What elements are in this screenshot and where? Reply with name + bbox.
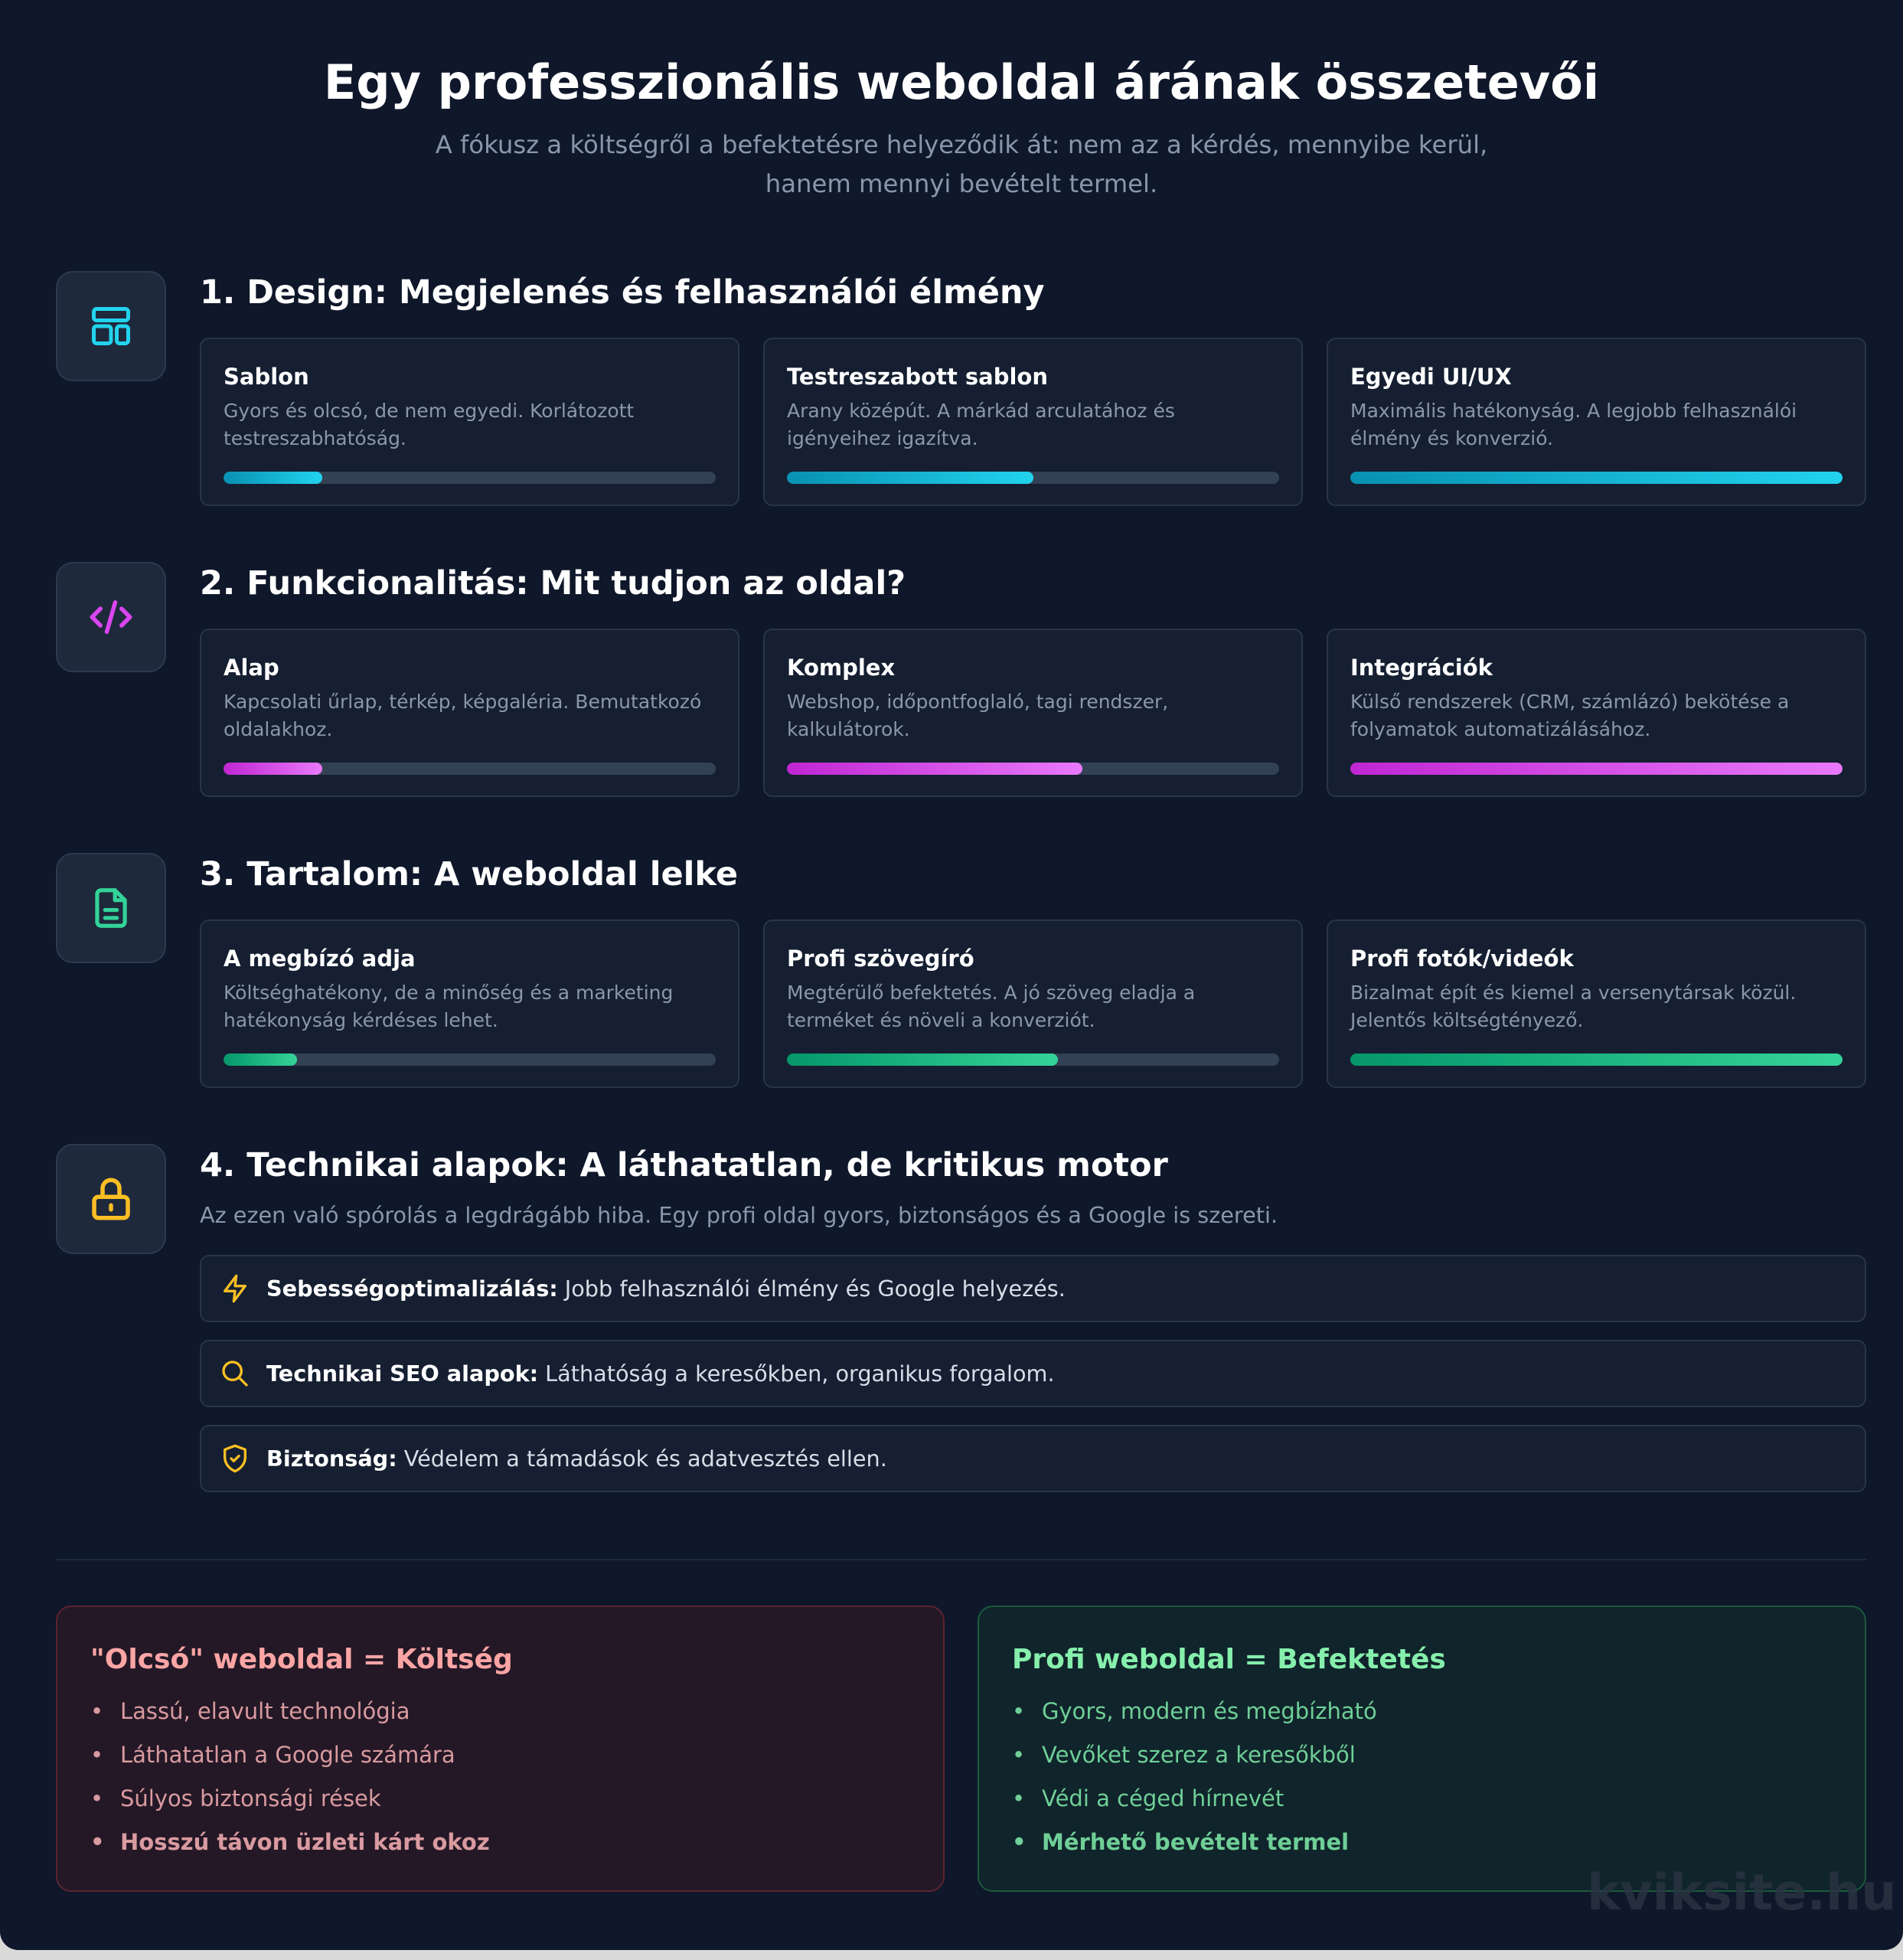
heading: technikai alapok: 4. Technikai alapok: A láthatatlan, de kritikus motor — [200, 1146, 1168, 1184]
list: profi: Gyors, modern és megbízható — [1042, 1698, 1377, 1724]
list: profi — [1015, 1698, 1377, 1855]
card: integrációk: Külső rendszerek (CRM, számlázó) bekötése a folyamatok automatizálásához. — [1350, 691, 1789, 740]
list: olcsó: Súlyos biztonsági rések — [120, 1785, 381, 1811]
item: seo: Technikai SEO alapok: — [266, 1361, 538, 1387]
card: alap: Kapcsolati űrlap, térkép, képgaléria. Bemutatkozó oldalakhoz. — [224, 691, 701, 740]
watermark: kviksite.hu — [1587, 1864, 1896, 1922]
subtitle — [436, 130, 1487, 198]
card: profi fotók/videók: Bizalmat épít és kiemel a versenytársak közül. Jelentős költségtényező. — [1350, 982, 1796, 1031]
card: testreszabott sablon: Arany középút. A márkád arculatához és igényeihez igazítva. — [787, 400, 1175, 449]
card: testreszabott sablon: Testreszabott sablon — [787, 364, 1048, 390]
icon: document — [56, 853, 166, 963]
list: profi: Mérhető bevételt termel — [1042, 1829, 1349, 1855]
card: a megbízó adja — [200, 920, 739, 1088]
heading: olcsó: "Olcsó" weboldal = Költség — [90, 1644, 513, 1675]
card: profi szövegíró — [763, 920, 1303, 1088]
card: sablon: Sablon — [224, 364, 309, 390]
card: profi fotók/videók — [1327, 920, 1866, 1088]
item: sebesség: Jobb felhasználói élmény és Google helyezés. — [565, 1276, 1066, 1302]
heading: profi: Profi weboldal = Befektetés — [1012, 1644, 1446, 1675]
card: a megbízó adja: A megbízó adja — [224, 946, 416, 972]
heading: design: 1. Design: Megjelenés és felhasználói élmény — [200, 273, 1045, 312]
subtitle: hanem mennyi bevételt termel. — [765, 169, 1157, 198]
panel: olcsó weboldal — [56, 1606, 945, 1892]
card: egyedi ui/ux: Egyedi UI/UX — [1350, 364, 1512, 390]
card: a megbízó adja: Költséghatékony, de a minőség és a marketing hatékonyság kérdéses lehet. — [224, 982, 673, 1031]
item: sebesség: Sebességoptimalizálás: — [266, 1276, 558, 1302]
list: olcsó: Hosszú távon üzleti kárt okoz — [120, 1829, 490, 1855]
item: seo: Láthatóság a keresőkben, organikus forgalom. — [545, 1361, 1055, 1387]
card: sablon — [200, 338, 739, 506]
card: komplex: Webshop, időpontfoglaló, tagi rendszer, kalkulátorok. — [787, 691, 1168, 740]
icon: lock — [56, 1144, 166, 1254]
item: biztonság: Biztonság: — [266, 1446, 397, 1472]
text: technikai leírás: Az ezen való spórolás a legdrágább hiba. Egy profi oldal gyors, biztonságos és a Google is szereti. — [200, 1202, 1278, 1228]
card: alap — [200, 629, 739, 797]
card: komplex — [763, 629, 1303, 797]
heading: tartalom: 3. Tartalom: A weboldal lelke — [200, 855, 738, 893]
list: olcsó — [93, 1698, 490, 1855]
card: profi szövegíró: Profi szövegíró — [787, 946, 974, 972]
card: integrációk: Integrációk — [1350, 655, 1493, 681]
list: olcsó: Láthatatlan a Google számára — [120, 1742, 455, 1768]
list: profi: Védi a céged hírnevét — [1042, 1785, 1284, 1811]
title: Egy professzionális weboldal árának összetevői — [324, 54, 1599, 110]
panel: profi weboldal — [978, 1606, 1866, 1892]
icon: layout — [56, 271, 166, 381]
icon: code — [56, 562, 166, 672]
item: biztonság — [200, 1425, 1866, 1492]
card: alap: Alap — [224, 655, 279, 681]
item: biztonság: Védelem a támadások és adatvesztés ellen. — [404, 1446, 887, 1472]
card: sablon: Gyors és olcsó, de nem egyedi. Korlátozott testreszabhatóság. — [224, 400, 634, 449]
item: sebesség — [200, 1255, 1866, 1322]
item: seo — [200, 1340, 1866, 1407]
subtitle: A fókusz a költségről a befektetésre helyeződik át: nem az a kérdés, mennyibe kerül, — [436, 130, 1487, 159]
card: profi szövegíró: Megtérülő befektetés. A jó szöveg eladja a terméket és növeli a konverziót. — [787, 982, 1195, 1031]
list: olcsó: Lassú, elavult technológia — [120, 1698, 410, 1724]
list: profi: Vevőket szerez a keresőkből — [1042, 1742, 1356, 1768]
card: integrációk — [1327, 629, 1866, 797]
card: profi fotók/videók: Profi fotók/videók — [1350, 946, 1574, 972]
card: komplex: Komplex — [787, 655, 895, 681]
heading: funkcionalitás: 2. Funkcionalitás: Mit tudjon az oldal? — [200, 564, 906, 603]
card: egyedi ui/ux: Maximális hatékonyság. A legjobb felhasználói élmény és konverzió. — [1350, 400, 1797, 449]
card: testreszabott sablon — [763, 338, 1303, 506]
card: egyedi ui/ux — [1327, 338, 1866, 506]
